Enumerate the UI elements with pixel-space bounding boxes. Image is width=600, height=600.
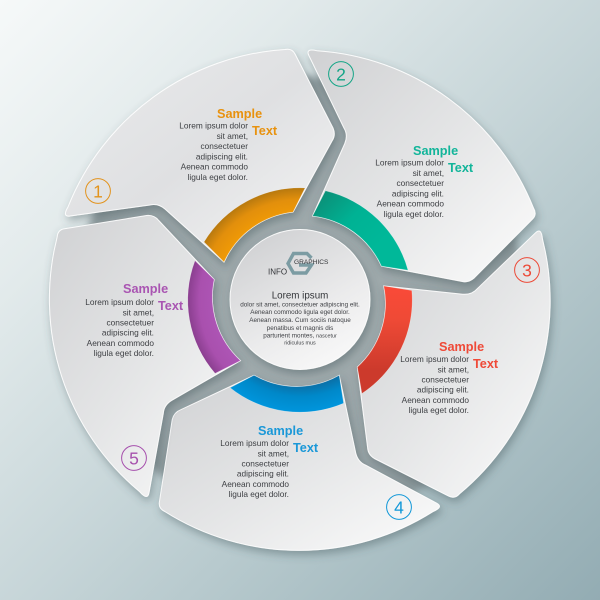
body text 4: Lorem ipsum dolor	[220, 438, 289, 448]
badge 3: 3	[522, 260, 532, 280]
body text 3: adipiscing elit.	[417, 385, 469, 395]
logo wordmark: GRAPHICS	[294, 259, 329, 266]
panel 1: orange	[65, 49, 334, 262]
body text 4: consectetuer	[241, 458, 289, 468]
center body text: dolor sit amet, consectetuer adipiscing elit.	[240, 302, 360, 308]
panel 3: red	[357, 231, 550, 497]
badge 5: 5	[129, 448, 139, 468]
body text 2: sit amet,	[413, 168, 444, 178]
center body text: penatibus et magnis dis	[267, 325, 333, 332]
heading: sample text blue: Text	[293, 441, 319, 455]
green band segment	[313, 191, 408, 270]
purple band segment	[188, 261, 240, 373]
panel 4 shape	[159, 375, 439, 550]
heading: sample text green: Text	[448, 161, 474, 175]
body text 3: Aenean commodo	[402, 395, 469, 405]
center body text: Aenean massa. Cum sociis natoque	[249, 317, 351, 324]
heading: sample text red: Sample	[439, 340, 484, 354]
body text 1: adipiscing elit.	[196, 151, 248, 161]
heading: sample text purple: Sample	[123, 282, 168, 296]
badge 1: 1	[93, 182, 103, 202]
body text 5: adipiscing elit.	[102, 328, 154, 338]
center body text: Aenean commodo ligula eget dolor.	[250, 309, 350, 316]
body text 5: ligula eget dolor.	[94, 348, 154, 358]
center disc	[230, 230, 370, 370]
hexagon mark	[288, 254, 312, 273]
badge 2: 2	[336, 64, 346, 84]
body text 5: Lorem ipsum dolor	[85, 297, 154, 307]
heading: sample text blue: Sample	[258, 424, 303, 438]
logo: infographics hexagon	[268, 254, 329, 276]
heading: sample text red	[439, 340, 499, 371]
badge 1	[86, 179, 110, 203]
red band segment	[357, 286, 412, 394]
body text 1: consectetuer	[200, 141, 248, 151]
body text 3: ligula eget dolor.	[409, 405, 469, 415]
heading: sample text purple	[123, 282, 184, 313]
body text 1: Lorem ipsum dolor	[179, 121, 248, 131]
body text 4: Aenean commodo	[222, 479, 289, 489]
center circle	[230, 230, 370, 370]
badge 3	[515, 258, 539, 282]
body text 5: Aenean commodo	[87, 338, 154, 348]
gap underlay disc	[76, 76, 524, 524]
heading: sample text green	[413, 144, 474, 175]
center title: Lorem ipsum	[272, 290, 328, 302]
center body text: parturient montes, nascetur	[263, 332, 337, 339]
heading: sample text blue	[258, 424, 319, 455]
heading: sample text orange	[217, 107, 278, 138]
badge 2	[329, 62, 353, 86]
badge 5	[122, 446, 146, 470]
center body text: ridiculus mus	[284, 341, 316, 347]
body text 3: consectetuer	[421, 374, 469, 384]
body text 2: adipiscing elit.	[392, 188, 444, 198]
body text 3: sit amet,	[438, 364, 469, 374]
heading: sample text orange: Sample	[217, 107, 262, 121]
orange band segment	[204, 188, 305, 262]
panel 4: blue	[159, 375, 439, 550]
panel 3 shape	[357, 231, 550, 497]
body text 2: consectetuer	[396, 178, 444, 188]
body text 1: ligula eget dolor.	[188, 172, 248, 182]
body text 4: sit amet,	[258, 448, 289, 458]
heading: sample text orange: Text	[252, 124, 278, 138]
panel 5: purple	[49, 215, 240, 497]
panel 2: green	[308, 50, 535, 282]
logo wordmark	[268, 259, 329, 276]
body text 5: consectetuer	[106, 318, 154, 328]
panel 5 shape	[49, 215, 240, 497]
panel 2 shape	[308, 50, 535, 282]
badge 4	[387, 495, 411, 519]
body text 2: Lorem ipsum dolor	[375, 158, 444, 168]
heading: sample text purple: Text	[158, 299, 184, 313]
body text 5: sit amet,	[123, 307, 154, 317]
body text 1: sit amet,	[217, 131, 248, 141]
heading: sample text green: Sample	[413, 144, 458, 158]
body text 3: Lorem ipsum dolor	[400, 354, 469, 364]
panel 1 shape	[65, 49, 334, 262]
blue band segment	[230, 375, 344, 412]
body text 2: Aenean commodo	[377, 199, 444, 209]
body text 2: ligula eget dolor.	[384, 209, 444, 219]
logo wordmark: INFO	[268, 268, 287, 276]
body text 4: adipiscing elit.	[237, 469, 289, 479]
body text 4: ligula eget dolor.	[229, 489, 289, 499]
heading: sample text red: Text	[473, 357, 499, 371]
badge 4: 4	[394, 498, 404, 518]
body text 1: Aenean commodo	[181, 162, 248, 172]
